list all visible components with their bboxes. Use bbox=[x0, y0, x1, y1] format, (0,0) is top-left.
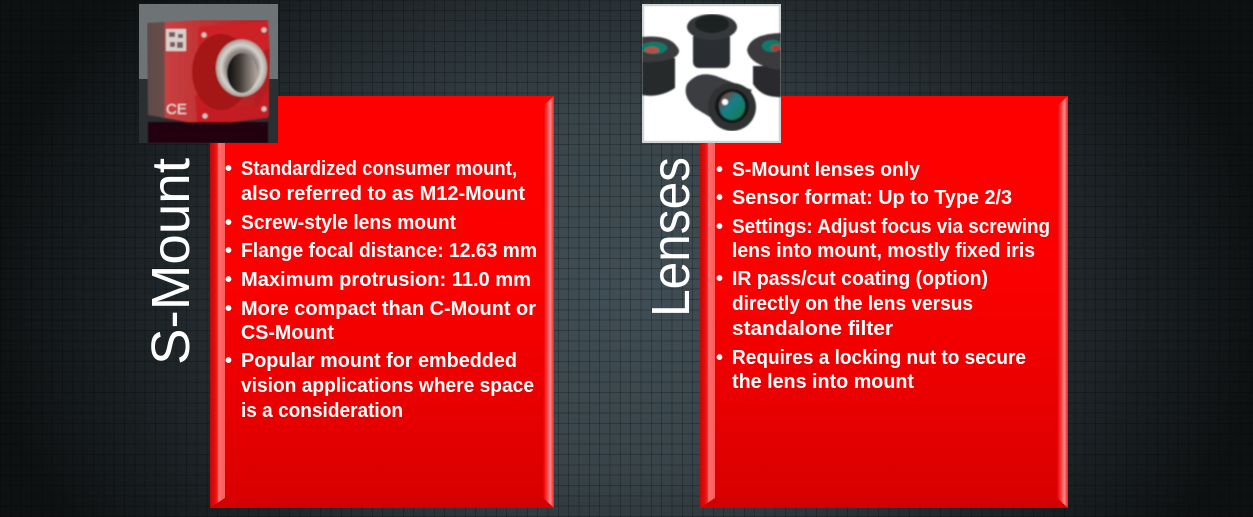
bullet list bbox=[225, 158, 537, 422]
bullet list: Maximum protrusion: 11.0 mm bbox=[241, 269, 531, 291]
bullet list: • bbox=[225, 350, 232, 372]
panel: Lenses details bbox=[700, 96, 1068, 508]
bullet list: directly on the lens versus bbox=[732, 293, 973, 315]
lens: top bbox=[687, 14, 737, 68]
bullet list: • bbox=[225, 298, 232, 320]
bullet list bbox=[716, 159, 1050, 393]
bullet list: More compact than C-Mount or bbox=[241, 298, 536, 320]
icon: red S-Mount camera photo: CE bbox=[166, 101, 187, 118]
heading: S-Mount: S-Mount bbox=[141, 158, 201, 365]
bullet list: • bbox=[716, 159, 723, 181]
bullet list: vision applications where space bbox=[241, 375, 534, 397]
bullet list: Popular mount for embedded bbox=[241, 350, 517, 372]
bullet list: • bbox=[225, 269, 232, 291]
red bevelled card bbox=[700, 96, 1068, 508]
bullet list: Sensor format: Up to Type 2/3 bbox=[732, 187, 1012, 209]
bullet list: also referred to as M12-Mount bbox=[241, 183, 525, 205]
bullet list: CS-Mount bbox=[241, 322, 334, 344]
bullet list: standalone filter bbox=[732, 318, 893, 340]
bullet list: • bbox=[225, 158, 232, 180]
bullet list: • bbox=[716, 216, 723, 238]
bullet list: S-Mount lenses only bbox=[732, 159, 921, 181]
bullet list: Requires a locking nut to secure bbox=[732, 347, 1026, 369]
lens: right bbox=[747, 33, 782, 97]
icon: red S-Mount camera photo bbox=[139, 4, 278, 143]
bullet list: • bbox=[225, 212, 232, 234]
panel: S-Mount details bbox=[210, 96, 554, 508]
bullet list: • bbox=[716, 268, 723, 290]
bullet list: Standardized consumer mount, bbox=[241, 158, 517, 180]
lens: front bbox=[686, 74, 756, 131]
bullet list: • bbox=[716, 347, 723, 369]
bullet list: Flange focal distance: 12.63 mm bbox=[241, 240, 537, 262]
red bevelled card bbox=[210, 96, 554, 508]
bullet list: • bbox=[716, 187, 723, 209]
bullet list: • bbox=[225, 240, 232, 262]
heading: Lenses: Lenses bbox=[641, 157, 701, 317]
icon: S-Mount lenses photo bbox=[641, 4, 782, 143]
bullet list: Screw-style lens mount bbox=[241, 212, 456, 234]
bullet list: the lens into mount bbox=[732, 371, 914, 393]
bullet list: Settings: Adjust focus via screwing bbox=[732, 216, 1050, 238]
bullet list: IR pass/cut coating (option) bbox=[732, 268, 988, 290]
lens: left bbox=[641, 37, 679, 96]
bullet list: lens into mount, mostly fixed iris bbox=[732, 240, 1035, 262]
bullet list: is a consideration bbox=[241, 400, 403, 422]
